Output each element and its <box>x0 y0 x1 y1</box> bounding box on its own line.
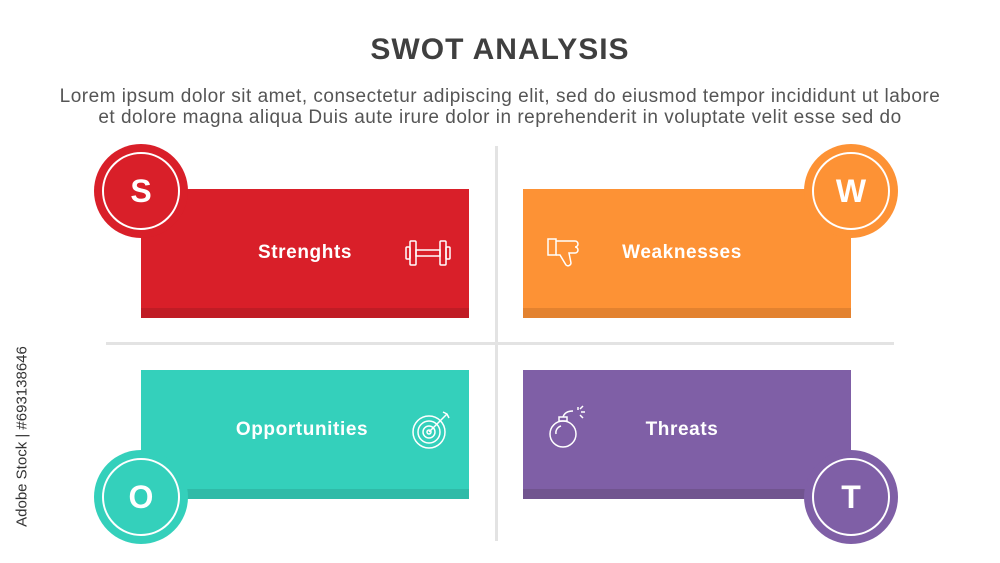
subtitle: et dolore magna aliqua Duis aute irure dolor in reprehenderit in voluptate velit esse sed do <box>98 107 902 128</box>
subtitle: Lorem ipsum dolor sit amet, consectetur adipiscing elit, sed do eiusmod tempor incididunt ut labore <box>60 86 940 107</box>
label: strengths: Strenghts <box>258 242 352 263</box>
circle: T <box>804 450 898 544</box>
panel: opportunities <box>141 370 469 499</box>
circle: W <box>804 144 898 238</box>
icon: target <box>412 411 450 449</box>
panel: threats <box>523 370 851 499</box>
circle: O: O <box>129 478 153 514</box>
circle: W: W <box>836 172 866 208</box>
panel: strengths <box>141 189 469 318</box>
label: threats: Threats <box>646 419 718 440</box>
label: opportunities: Opportunities <box>236 419 368 440</box>
icon: thumbs down <box>547 238 579 267</box>
circle: O <box>94 450 188 544</box>
circle: T: T <box>841 478 861 514</box>
title: SWOT ANALYSIS <box>370 33 630 66</box>
panel: weaknesses <box>523 189 851 318</box>
subtitle <box>60 86 940 128</box>
label: weaknesses: Weaknesses <box>622 242 742 263</box>
circle: S <box>94 144 188 238</box>
icon: bomb <box>549 406 585 448</box>
circle: S: S <box>130 172 152 208</box>
icon: dumbbell <box>405 240 451 266</box>
side credit: Adobe Stock | #693138646 <box>14 346 30 527</box>
